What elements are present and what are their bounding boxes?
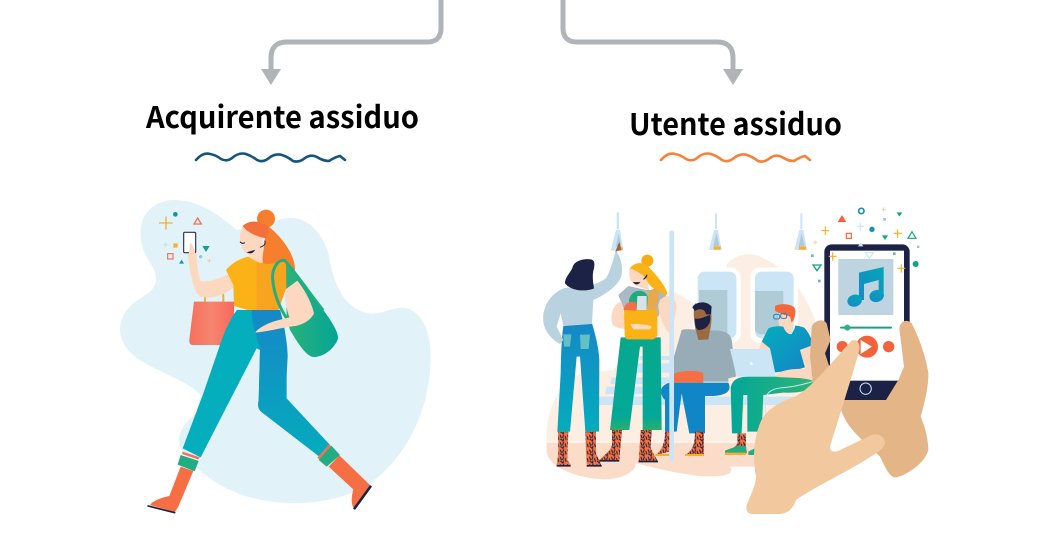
face details [240, 241, 265, 253]
forearm [775, 345, 816, 382]
phone [184, 232, 196, 255]
yellow t-shirt [226, 257, 296, 311]
progress bar [840, 327, 892, 329]
bottle [637, 296, 647, 310]
illustration: hand holding phone [746, 207, 928, 514]
album cover [838, 259, 893, 315]
far hand palm [840, 321, 928, 477]
background blob [120, 200, 431, 503]
hair front [243, 222, 268, 238]
floor [547, 443, 760, 479]
glasses [774, 314, 780, 319]
face and neck [629, 268, 649, 291]
hip arm [255, 281, 314, 333]
eye and mouth [634, 275, 647, 284]
hair bun [257, 210, 275, 228]
illustration: commuters on a train [543, 212, 820, 479]
sock and shoes [727, 433, 747, 453]
far hand fingers left [810, 320, 831, 387]
music note [846, 267, 885, 308]
arrow: left branch [261, 0, 441, 85]
woman with grocery bag [599, 255, 677, 462]
near hand [746, 340, 885, 514]
home button [860, 383, 871, 394]
phone body [824, 244, 910, 400]
front leg [183, 310, 330, 458]
greens [629, 291, 648, 310]
hair back [262, 225, 295, 273]
wall background [547, 254, 820, 442]
face and neck [240, 225, 263, 264]
t-shirt shaded side [257, 262, 296, 311]
face [778, 312, 795, 334]
sparkles [159, 212, 211, 264]
grey shirt [618, 286, 666, 317]
left boot and cuff [147, 452, 200, 514]
tomato [623, 302, 637, 311]
boots [599, 430, 622, 460]
hair [630, 263, 667, 297]
shopping bag [189, 302, 234, 345]
teal t-shirt [762, 326, 813, 372]
arm behind laptop [757, 342, 772, 357]
man with beard [655, 302, 736, 456]
trousers [731, 377, 814, 433]
far hand over phone right edge [877, 321, 928, 417]
wavy underline: orange [661, 154, 810, 162]
forearm over bag [630, 324, 652, 329]
laptop [730, 349, 776, 377]
arm to pole [658, 296, 677, 335]
heading: Acquirente assiduo: Acquirente assiduo [145, 93, 419, 137]
heading: Utente assiduo: Utente assiduo [629, 100, 842, 144]
back leg shading [252, 310, 330, 458]
pole [669, 231, 674, 461]
windows [693, 268, 798, 343]
hair bun [641, 255, 653, 267]
right boot and cuff [317, 444, 372, 510]
arm left [611, 302, 652, 329]
grocery bag [624, 310, 657, 339]
bread [647, 289, 659, 310]
raised arm and hand [187, 248, 234, 298]
seat and back rests [598, 356, 817, 405]
shoulder bag [273, 260, 338, 357]
man with laptop [725, 304, 816, 455]
green trousers [610, 337, 662, 430]
wavy underline: blue [196, 154, 345, 162]
ceiling handles [611, 212, 807, 251]
illustration: shopper [120, 200, 431, 514]
playback controls [837, 341, 848, 352]
hair [775, 304, 795, 323]
shopping bag handle [205, 281, 223, 303]
woman in light blue, back view [543, 242, 622, 467]
arrow: right branch [563, 0, 743, 85]
sparkles [811, 207, 919, 282]
